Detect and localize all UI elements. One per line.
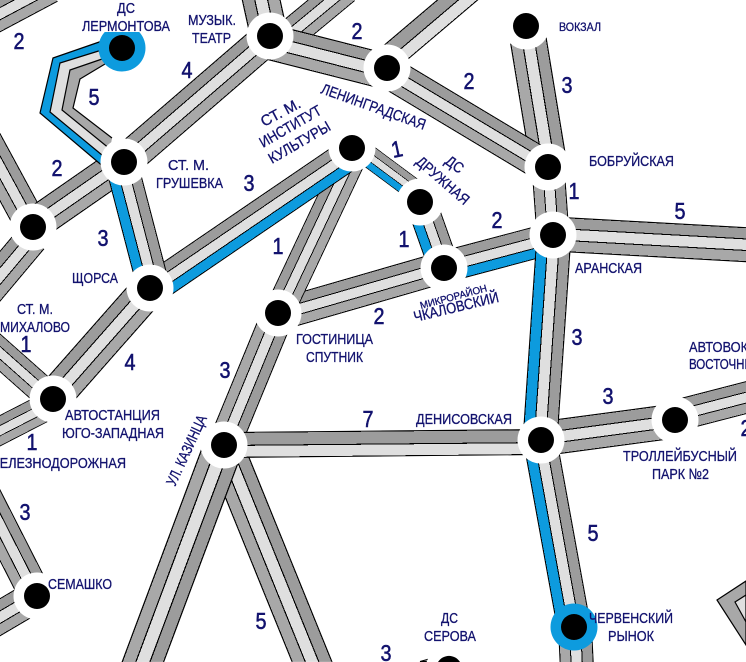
number: 1: 1 [26, 429, 38, 455]
road: Казинца south-east [206, 438, 333, 662]
label: Микрорайон Чкаловский: МИКРОРАЙОН [418, 281, 488, 312]
label: Аранская: АРАНСКАЯ [575, 260, 642, 277]
label: ул. Казинца: УЛ. КАЗИНЦА [163, 413, 211, 489]
label: Червенский рынок: ЧЕРВЕНСКИЙ [589, 609, 673, 627]
node: Червенский рынок [550, 604, 598, 650]
label: Музык. театр: ТЕАТР [192, 30, 231, 47]
label: ДС Дружная: ДРУЖНАЯ [412, 153, 473, 209]
road: Михалово north-west [0, 104, 47, 234]
road: Денисовская to Троллейбусный парк [538, 404, 677, 456]
node: ДС Серова [427, 646, 471, 662]
road: Грушевка to Щорса [105, 158, 170, 293]
label: Гостиница Спутник [296, 331, 373, 366]
number: 7: 7 [362, 406, 374, 432]
node: ДС Лермонтова [98, 24, 146, 72]
node: Музык. театр [246, 12, 294, 60]
label: Ст. м. Грушевка: СТ. М. [168, 157, 209, 174]
node: Институт культуры [328, 124, 376, 172]
label: Щорса: ЩОРСА [72, 270, 118, 287]
number: 3: 3 [562, 72, 572, 98]
number: 3: 3 [220, 357, 230, 383]
road: Автостанция north-west [0, 324, 61, 410]
label: ДС Лермонтова: ДС [117, 0, 135, 17]
label: Троллейбусный парк №2 [623, 447, 737, 483]
road: Дружная to Чкаловский [406, 197, 459, 272]
label: ДС Лермонтова [82, 0, 170, 35]
number: 2: 2 [52, 155, 62, 181]
road: Денисовская to Червенский рынок [523, 437, 591, 630]
node: Гостиница Спутник [254, 290, 302, 336]
road: Щорса to Институт культуры [140, 140, 360, 304]
node: Бобруйская [524, 144, 572, 190]
label: Вокзал: ВОКЗАЛ [559, 20, 601, 34]
label: Ст. м. Грушевка [156, 157, 223, 192]
number: 3: 3 [244, 170, 254, 196]
label: Автостанция Юго-Западная: АВТОСТАНЦИЯ [65, 407, 160, 424]
label: Троллейбусный парк №2: ПАРК №2 [652, 466, 709, 483]
number: 3: 3 [602, 383, 614, 409]
road: Семашко north-west [0, 479, 51, 603]
road: Автостанция to Щорса [38, 277, 163, 411]
road: Вокзал to Бобруйская [508, 23, 567, 169]
number: 5: 5 [674, 198, 686, 224]
road: Музык. театр north-east [265, 0, 355, 59]
number: 1: 1 [389, 135, 405, 163]
label: Ст. м. Михалово: МИХАЛОВО [0, 319, 70, 336]
label: ДС Серова: СЕРОВА [424, 628, 476, 645]
road: Аранская to Денисовская [523, 234, 571, 441]
number: 1: 1 [20, 331, 32, 357]
node: Автостанция Юго-Западная [30, 376, 76, 422]
node: Ленинградская [364, 44, 410, 92]
node: ул. Казинца [200, 422, 248, 468]
number: 3: 3 [572, 324, 582, 350]
number: 3: 3 [98, 225, 108, 251]
road: Чкаловский to Аранская [440, 222, 557, 282]
road: Михалово south-west [0, 228, 44, 323]
road: Музык. театр north [240, 0, 289, 44]
road: bottom-right corner fragment [717, 581, 746, 645]
road: Казинца south-west [122, 438, 243, 662]
road: Бобруйская to Аранская [532, 165, 569, 236]
label: Ст. м. Институт культуры: СТ. М. [258, 95, 304, 131]
label: ДС Серова: ДС [441, 610, 458, 627]
road: Гостиница to Институт культуры [264, 144, 369, 320]
label: Ст. м. Институт культуры: КУЛЬТУРЫ [266, 118, 334, 167]
node: Аранская [530, 212, 576, 258]
label: Автостанция Юго-Западная: ЮГО-ЗАПАДНАЯ [62, 425, 164, 442]
road: ДС Лермонтова to Грушевка [40, 40, 112, 168]
number: 1: 1 [272, 233, 284, 259]
node: Вокзал [502, 2, 550, 50]
label: Музык. театр [188, 12, 236, 47]
label: Ленинградская: ЛЕНИНГРАДСКАЯ [319, 81, 428, 134]
road: Ленинградская to Бобруйская [380, 58, 557, 182]
number: 5: 5 [588, 520, 598, 546]
label: Денисовская: ДЕНИСОВСКАЯ [416, 411, 512, 428]
road: Музык. театр to Ленинградская [258, 23, 399, 91]
label: ДС Дружная: ДС [442, 152, 467, 177]
node: Михалово [10, 204, 56, 250]
label: Автостанция Юго-Западная [62, 407, 164, 442]
number: 4: 4 [124, 349, 136, 375]
node: Денисовская [518, 416, 564, 464]
label: Автовокзал Восточный [689, 339, 746, 373]
road: Троллейбусный парк east [671, 378, 746, 431]
road: Казинца to Денисовская [224, 429, 541, 458]
number: 2: 2 [352, 18, 362, 44]
road: Институт культуры to Дружная [344, 134, 427, 204]
number: 2 top-left: 2 [14, 28, 24, 54]
number: 5: 5 [88, 84, 100, 110]
road: Аранская east [552, 217, 746, 263]
label: Музык. театр: МУЗЫК. [188, 12, 236, 29]
road: Автостанция south-west [0, 392, 58, 453]
road: Червенский рынок south [558, 626, 594, 662]
road: Музык. театр to Грушевка [113, 23, 281, 175]
road: Гостиница to Чкаловский [274, 252, 449, 330]
label: Ст. м. Михалово: СТ. М. [17, 301, 53, 318]
number: 2: 2 [464, 68, 474, 94]
label: Червенский рынок [589, 609, 673, 645]
number: 1: 1 [568, 178, 580, 204]
number: 1: 1 [398, 226, 410, 252]
node: Грушевка [100, 138, 148, 186]
node: Троллейбусный парк №2 [652, 396, 698, 444]
node: Семашко [14, 572, 60, 620]
label: Червенский рынок: РЫНОК [608, 628, 654, 645]
road: top-left fragment [0, 0, 58, 34]
label: ДС Лермонтова: ЛЕРМОНТОВА [82, 18, 170, 35]
number: 2: 2 [492, 207, 502, 233]
road: Ленинградская north-east [376, 0, 478, 72]
road: ДС Серова west [420, 654, 447, 662]
label: Ст. м. Институт культуры: ИНСТИТУТ [256, 102, 325, 151]
node: Щорса [126, 264, 174, 312]
label: Гостиница Спутник: СПУТНИК [306, 349, 363, 366]
road: Михалово to Грушевка [22, 148, 134, 240]
road: Семашко south-west [0, 582, 44, 643]
road: Гостиница to Казинца [209, 308, 293, 452]
node: Дружная [396, 178, 444, 226]
label: ДС Серова [424, 610, 476, 645]
label: Ст. м. Грушевка: ГРУШЕВКА [156, 175, 223, 192]
node: Чкаловский [420, 244, 468, 292]
number: 3: 3 [20, 499, 30, 525]
number: 2: 2 [374, 303, 384, 329]
label: Гостиница Спутник: ГОСТИНИЦА [296, 331, 373, 348]
number: 4: 4 [182, 57, 193, 83]
number: 5: 5 [256, 608, 266, 634]
label: Микрорайон Чкаловский: ЧКАЛОВСКИЙ [412, 288, 501, 326]
label: Семашко: СЕМАШКО [48, 576, 112, 593]
label: Бобруйская: БОБРУЙСКАЯ [589, 152, 674, 170]
label: Ст. м. Михалово [0, 301, 70, 336]
